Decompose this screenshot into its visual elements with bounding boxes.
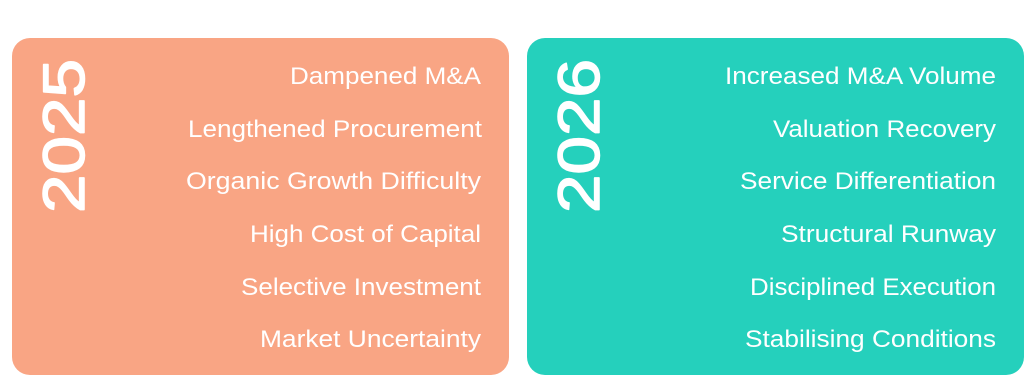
list: 2026 items: Service Differentiation — [740, 168, 996, 195]
list: 2026 items: Stabilising Conditions — [745, 326, 996, 353]
list: 2025 items: Selective Investment — [241, 274, 481, 301]
heading: 2026: 2026 — [547, 59, 612, 213]
list: 2026 items: Increased M&A Volume — [725, 63, 996, 90]
list: 2026 items — [725, 63, 996, 353]
list: 2025 items: Lengthened Procurement — [188, 116, 482, 143]
list: 2025 items: High Cost of Capital — [250, 221, 481, 248]
list: 2026 items: Structural Runway — [781, 221, 996, 248]
list: 2026 items: Valuation Recovery — [773, 116, 996, 143]
list: 2025 items — [186, 63, 482, 353]
panel: 2025 — [12, 38, 509, 375]
heading: 2025: 2025 — [32, 59, 97, 213]
panel: 2026 — [527, 38, 1024, 375]
list: 2025 items: Dampened M&A — [290, 63, 481, 90]
list: 2026 items: Disciplined Execution — [750, 274, 996, 301]
list: 2025 items: Market Uncertainty — [260, 326, 481, 353]
list: 2025 items: Organic Growth Difficulty — [186, 168, 481, 195]
